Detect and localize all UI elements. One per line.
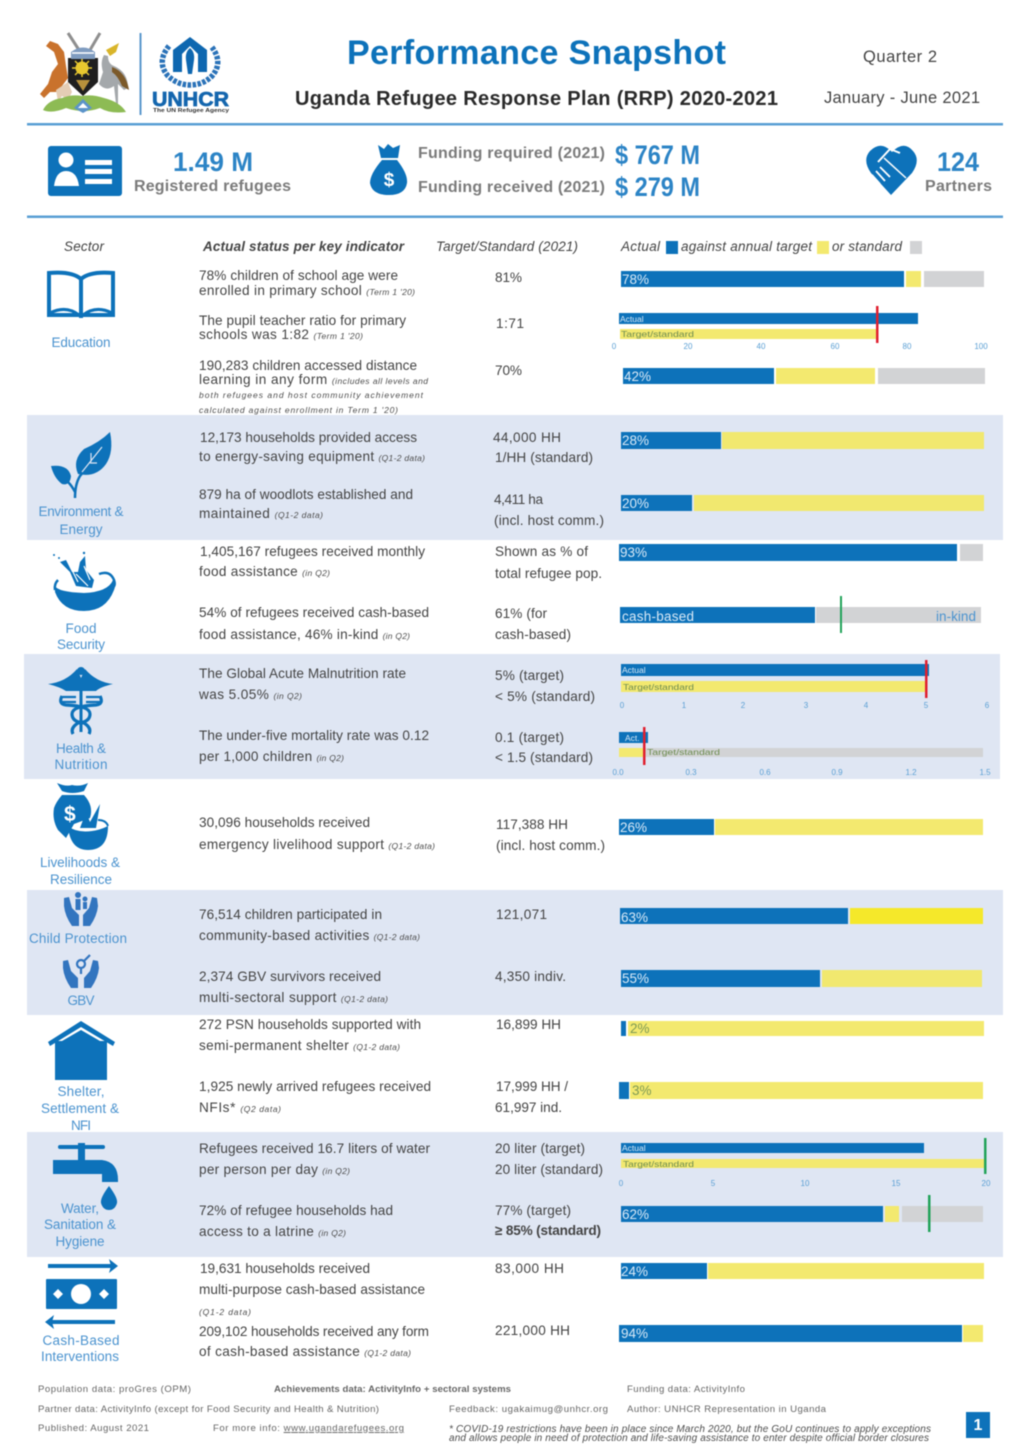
indicator: food assistance: 1,405,167 refugees received monthly <box>200 544 425 559</box>
indicator: NFIs <box>199 1079 983 1115</box>
header <box>40 33 980 115</box>
indicator: energy saving: 28% <box>622 433 649 448</box>
indicator: pupil teacher ratio: 40 <box>757 342 766 351</box>
footer sources: Achievements data: ActivityInfo + sectoral systems <box>274 1384 511 1395</box>
indicator: energy saving: 1/HH (standard) <box>495 450 593 465</box>
indicator: distance learning: learning in any form (includes all levels and <box>199 372 428 387</box>
indicator: pupil teacher ratio: 100 <box>974 342 988 351</box>
refugees figure: 1.49 M <box>173 147 253 177</box>
indicator: distance learning: 70% <box>495 363 522 378</box>
partners figure: 124 <box>937 147 979 177</box>
indicator: distance learning: 42% <box>624 369 651 384</box>
indicator: water per person: 0 <box>619 1179 624 1188</box>
panel: education <box>49 268 988 415</box>
indicator: malnutrition: 2 <box>741 701 746 710</box>
panel: cash-based interventions: Interventions <box>41 1349 119 1364</box>
panel: water, sanitation and hygiene <box>27 1132 1003 1257</box>
indicator: community-based activities <box>199 907 983 943</box>
indicator: under-five mortality: 1.2 <box>905 768 917 777</box>
panel: food security <box>53 544 983 652</box>
logo divider <box>140 33 142 115</box>
indicator: under-five mortality <box>199 727 991 777</box>
indicator: food assistance: food assistance (in Q2) <box>199 564 330 579</box>
footer sources: * COVID-19 restrictions have been in place since March 2020, but the GoU continues to apply exceptions <box>449 1424 931 1435</box>
icon: bowl with grain <box>53 552 115 611</box>
indicator: under-five mortality: per 1,000 children (in Q2) <box>199 749 344 764</box>
indicator: PSN shelter: 16,899 HH <box>496 1017 561 1032</box>
indicator: water per person: 20 liter (target) <box>495 1141 585 1156</box>
indicator: enrolment: 81% <box>495 270 522 285</box>
indicator: livelihood support <box>199 815 983 853</box>
table header <box>64 239 922 254</box>
indicator: multi-purpose cash: 19,631 households received <box>200 1261 370 1276</box>
indicator: NFIs: NFIs* (Q2 data) <box>199 1100 281 1115</box>
indicator: latrine access: 77% (target) <box>495 1203 571 1218</box>
quarter: Quarter 2 <box>863 48 937 66</box>
indicator: any form of cash <box>199 1323 983 1359</box>
indicator: malnutrition <box>198 660 990 710</box>
indicator: pupil teacher ratio: The pupil teacher ratio for primary <box>199 313 406 328</box>
indicator: under-five mortality: The under-five mortality rate was 0.12 <box>199 728 429 743</box>
indicator: livelihood support: 30,096 households received <box>199 815 370 830</box>
icon: caduceus <box>48 667 113 734</box>
panel: health and nutrition <box>24 654 1000 779</box>
indicator: community-based activities: 76,514 children participated in <box>199 907 382 922</box>
title: Performance Snapshot <box>347 34 726 72</box>
footer sources: Feedback: ugakaimug@unhcr.org <box>449 1404 608 1415</box>
indicator: water per person: 10 <box>801 1179 810 1188</box>
indicator: under-five mortality: 0.0 <box>612 768 624 777</box>
subtitle: Uganda Refugee Response Plan (RRP) 2020-2021 <box>295 88 778 110</box>
funding received value: $ 279 M <box>615 172 700 202</box>
panel: livelihoods and resilience: Resilience <box>50 872 112 887</box>
logo: UNHCR: UNHCR <box>152 89 230 111</box>
indicator: under-five mortality: 0.6 <box>759 768 771 777</box>
indicator: any form of cash: 209,102 households received any form <box>199 1324 429 1339</box>
logo: UNHCR <box>152 37 230 114</box>
indicator: latrine access: ≥ 85% (standard) <box>495 1223 601 1238</box>
indicator: PSN shelter: 2% <box>630 1021 650 1036</box>
footer sources: and allows people in need of protection and life-saving assistance to enter despite official border closures <box>449 1433 929 1444</box>
indicator: malnutrition: 6 <box>985 701 990 710</box>
indicator: energy saving: 44,000 HH <box>493 430 561 445</box>
icon: handshake heart <box>866 146 917 195</box>
indicator: food assistance <box>199 544 983 581</box>
indicator: energy saving: to energy-saving equipment (Q1-2 data) <box>199 449 425 464</box>
indicator: any form of cash: of cash-based assistance (Q1-2 data) <box>199 1344 411 1359</box>
indicator: GBV survivors: 2,374 GBV survivors received <box>199 969 381 984</box>
indicator: community-based activities: 63% <box>621 910 648 925</box>
indicator: NFIs: 17,999 HH / <box>496 1079 568 1094</box>
indicator: cash based food: food assistance, 46% in-kind (in Q2) <box>199 627 410 642</box>
indicator: any form of cash: 94% <box>621 1326 648 1341</box>
indicator: latrine access: 72% of refugee households had <box>199 1203 393 1218</box>
indicator: enrolment <box>199 268 984 298</box>
indicator: PSN shelter: semi-permanent shelter (Q1-2 data) <box>199 1038 400 1053</box>
indicator: enrolment: 78% <box>622 272 649 287</box>
logo: Uganda coat of arms <box>40 33 129 113</box>
footer sources: Partner data: ActivityInfo (except for Food Security and Health & Nutrition) <box>38 1404 379 1415</box>
indicator: pupil teacher ratio: 1:71 <box>496 316 524 331</box>
indicator: malnutrition: < 5% (standard) <box>495 689 595 704</box>
indicator: under-five mortality: 0.9 <box>831 768 843 777</box>
indicator: water per person: Refugees received 16.7 liters of water <box>199 1141 430 1156</box>
footer sources: Funding data: ActivityInfo <box>627 1384 745 1395</box>
indicator: under-five mortality: Act. <box>625 733 640 743</box>
sector label: Cash-Based <box>42 1333 120 1348</box>
panel: protection <box>27 890 1003 1015</box>
indicator: food assistance: Shown as % of <box>495 544 588 559</box>
sector label: Child Protection <box>29 931 127 946</box>
indicator: pupil teacher ratio <box>199 306 988 351</box>
sector label: Livelihoods & <box>40 855 120 870</box>
table header: against annual target <box>681 239 813 254</box>
sector label: Shelter, <box>58 1084 104 1099</box>
logo: UNHCR: The UN Refugee Agency <box>153 108 230 114</box>
refugees label: Registered refugees <box>134 178 291 195</box>
indicator: cash based food: 54% of refugees received cash-based <box>199 605 429 620</box>
indicator: distance learning: calculated against enrollment in Term 1 '20) <box>199 405 398 415</box>
indicator: GBV survivors: multi-sectoral support (Q1-2 data) <box>199 990 388 1005</box>
indicator: woodlots: 20% <box>622 496 649 511</box>
indicator: malnutrition: 3 <box>804 701 809 710</box>
footer sources: Population data: proGres (OPM) <box>38 1384 191 1395</box>
indicator: pupil teacher ratio: 80 <box>903 342 912 351</box>
indicator: malnutrition: was 5.05% (in Q2) <box>198 687 302 702</box>
footer sources: Published: August 2021 <box>38 1423 149 1434</box>
indicator: under-five mortality: 0.1 (target) <box>495 730 564 745</box>
panel: environment and energy <box>27 415 1003 540</box>
panel: health and nutrition: Nutrition <box>54 757 108 772</box>
icon: hands with GBV symbol <box>63 955 99 988</box>
indicator: food assistance: 93% <box>620 545 647 560</box>
indicator: woodlots <box>199 487 984 528</box>
key figures strip <box>48 140 992 202</box>
indicator: pupil teacher ratio: 0 <box>612 342 617 351</box>
indicator: under-five mortality: 1.5 <box>979 768 991 777</box>
indicator: PSN shelter <box>199 1017 984 1053</box>
icon: money bag: $ <box>384 170 395 191</box>
sector label: Education <box>52 335 110 350</box>
indicator: cash based food: in-kind <box>936 609 976 624</box>
indicator: distance learning: 190,283 children accessed distance <box>199 358 417 373</box>
icon: ID card <box>48 146 122 196</box>
indicator: NFIs: 61,997 ind. <box>495 1100 562 1115</box>
indicator: woodlots: maintained (Q1-2 data) <box>199 506 323 521</box>
indicator: water per person: Actual <box>622 1143 646 1153</box>
indicator: GBV survivors <box>199 969 982 1005</box>
indicator: any form of cash: 221,000 HH <box>495 1323 570 1338</box>
indicator: energy saving <box>199 430 984 465</box>
indicator: water per person: 5 <box>711 1179 716 1188</box>
indicator: NFIs: 1,925 newly arrived refugees received <box>199 1079 431 1094</box>
partners label: Partners <box>925 178 992 195</box>
indicator: under-five mortality: 0.3 <box>685 768 697 777</box>
funding required value: $ 767 M <box>615 140 700 170</box>
indicator: malnutrition: The Global Acute Malnutrition rate <box>199 666 406 681</box>
icon: money bag <box>370 144 407 195</box>
funding received label: Funding received (2021) <box>418 179 605 196</box>
indicator: multi-purpose cash: multi-purpose cash-based assistance <box>199 1282 425 1297</box>
panel: livelihoods and resilience <box>40 783 983 887</box>
table header: Target/Standard (2021) <box>436 239 578 254</box>
indicator: malnutrition: Actual <box>622 665 646 675</box>
indicator: malnutrition: 0 <box>620 701 625 710</box>
indicator: pupil teacher ratio: Target/standard <box>621 329 694 339</box>
indicator: NFIs: 3% <box>632 1083 652 1098</box>
footer sources: For more info: www.ugandarefugees.org <box>213 1423 404 1434</box>
indicator: under-five mortality: Target/standard <box>647 747 720 757</box>
table header: Actual <box>620 239 661 254</box>
footer sources: Author: UNHCR Representation in Uganda <box>627 1404 827 1415</box>
indicator: PSN shelter: 272 PSN households supported with <box>199 1017 421 1032</box>
indicator: cash based food: 61% (for <box>495 606 547 621</box>
indicator: distance learning: both refugees and host community achievement <box>199 390 424 400</box>
panel: water, sanitation and hygiene: Sanitation & <box>44 1217 116 1232</box>
indicator: malnutrition: 1 <box>682 701 687 710</box>
indicator: woodlots: 4,411 ha <box>494 492 543 507</box>
indicator: latrine access: access to a latrine (in Q2) <box>199 1224 346 1239</box>
panel: environment and energy: Energy <box>60 522 103 537</box>
indicator: food assistance: total refugee pop. <box>495 566 602 581</box>
funding required label: Funding required (2021) <box>418 145 605 162</box>
indicator: multi-purpose cash <box>199 1261 984 1317</box>
panel: shelter, settlement and NFI <box>41 1017 984 1133</box>
indicator: malnutrition: Target/standard <box>623 682 694 692</box>
icon: money bag with bowl: $ <box>64 803 76 826</box>
panel: food security: Security <box>57 637 105 652</box>
indicator: water per person <box>199 1138 991 1188</box>
panel: water, sanitation and hygiene: Hygiene <box>56 1234 104 1249</box>
indicator: livelihood support: 117,388 HH <box>496 817 568 832</box>
sector label: Environment & <box>38 504 124 519</box>
indicator: GBV survivors: 55% <box>622 971 649 986</box>
icon: leaves <box>51 432 111 498</box>
panel: cash-based interventions <box>41 1259 984 1364</box>
indicator: water per person: 20 liter (standard) <box>495 1162 603 1177</box>
indicator: under-five mortality: < 1.5 (standard) <box>495 750 593 765</box>
period: January - June 2021 <box>824 89 980 107</box>
indicator: cash based food: cash-based) <box>495 627 571 642</box>
indicator: enrolment: enrolled in primary school (Term 1 '20) <box>199 283 415 298</box>
panel: shelter, settlement and NFI: Settlement & <box>41 1101 119 1116</box>
indicator: energy saving: 12,173 households provided access <box>200 430 417 445</box>
page number <box>966 1412 990 1438</box>
indicator: enrolment: 78% children of school age were <box>199 268 398 283</box>
indicator: woodlots: (incl. host comm.) <box>494 513 604 528</box>
sector label: GBV <box>68 993 94 1008</box>
sector label: Food <box>66 621 96 636</box>
icon: tap with drop <box>53 1143 118 1210</box>
indicator: livelihood support: 26% <box>620 820 647 835</box>
indicator: pupil teacher ratio: 20 <box>684 342 693 351</box>
icon: money bag with bowl <box>54 783 108 850</box>
indicator: malnutrition: 4 <box>864 701 869 710</box>
indicator: water per person: per person per day (in Q2) <box>199 1162 350 1177</box>
footer sources <box>38 1384 931 1444</box>
indicator: water per person: 15 <box>892 1179 901 1188</box>
icon: house <box>48 1021 115 1080</box>
indicator: community-based activities: 121,071 <box>496 907 547 922</box>
table header: Actual status per key indicator <box>202 239 405 254</box>
table header: Sector <box>64 239 104 254</box>
indicator: livelihood support: emergency livelihood support (Q1-2 data) <box>199 837 435 852</box>
indicator: cash based food: cash-based <box>622 609 694 624</box>
indicator: multi-purpose cash: 83,000 HH <box>495 1261 564 1276</box>
icon: hands with child <box>64 892 98 926</box>
indicator: malnutrition: 5% (target) <box>495 668 564 683</box>
indicator: latrine access <box>199 1195 983 1239</box>
icon: open book <box>49 273 113 318</box>
indicator: latrine access: 62% <box>622 1207 649 1222</box>
indicator: pupil teacher ratio: Actual <box>620 314 644 324</box>
indicator: water per person: 20 <box>982 1179 991 1188</box>
sector label: Health & <box>56 741 106 756</box>
indicator: water per person: Target/standard <box>623 1159 694 1169</box>
table header: or standard <box>832 239 902 254</box>
panel: shelter, settlement and NFI: NFI <box>71 1118 91 1133</box>
indicator: multi-purpose cash: 24% <box>621 1264 648 1279</box>
indicator: woodlots: 879 ha of woodlots established and <box>199 487 413 502</box>
icon: banknote with arrows <box>45 1259 118 1329</box>
indicator: malnutrition: 5 <box>924 701 929 710</box>
indicator: pupil teacher ratio: schools was 1:82 (Term 1 '20) <box>199 327 363 342</box>
indicator: GBV survivors: 4,350 indiv. <box>495 969 566 984</box>
page number: 1 <box>974 1417 983 1434</box>
indicator: pupil teacher ratio: 60 <box>831 342 840 351</box>
sector label: Water, <box>61 1201 99 1216</box>
indicator: cash based food <box>199 596 981 642</box>
indicator: multi-purpose cash: (Q1-2 data) <box>199 1307 251 1317</box>
indicator: community-based activities: community-based activities (Q1-2 data) <box>199 928 420 943</box>
indicator: distance learning <box>199 358 985 415</box>
indicator: livelihood support: (incl. host comm.) <box>496 838 605 853</box>
